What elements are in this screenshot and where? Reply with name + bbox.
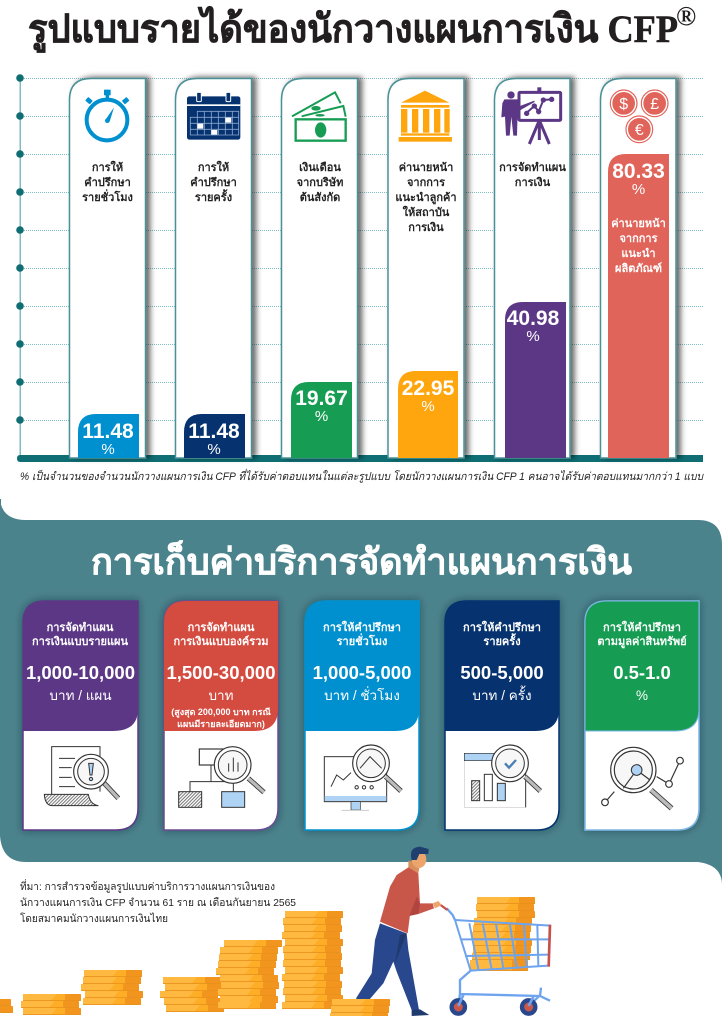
column: salary [282, 78, 358, 458]
bar 80.33% with label: แนะนำ [621, 247, 656, 260]
icon: report magnifier [464, 745, 540, 807]
column: hourly advice [70, 78, 146, 458]
coins in cart [470, 897, 535, 971]
shopping cart with coins [441, 897, 551, 1014]
fee card: hourly: 1,000-5,000 [313, 662, 411, 683]
column: per-session advice [176, 78, 252, 458]
bar 11.48% [78, 414, 139, 458]
label: แนะนำลูกค้า [395, 191, 457, 205]
bar 11.48%: % [207, 441, 221, 458]
bar 19.67%: % [315, 408, 328, 425]
source note: นักวางแผนการเงิน CFP จำนวน 61 ราย ณ เดือนกันยายน 2565 [20, 896, 296, 909]
fee card: asset-based: ตามมูลค่าสินทรัพย์ [597, 635, 687, 649]
bar 80.33% with label: จากการ [619, 233, 658, 245]
bar 11.48%: 11.48 [82, 420, 134, 443]
icon: currency coins: $ [619, 96, 628, 113]
fee card: per session: รายครั้ง [483, 633, 521, 648]
fee card: per session [445, 601, 559, 830]
label: จากการ [407, 177, 445, 189]
panel background [0, 499, 722, 885]
fee card: hourly: บาท / ชั่วโมง [324, 686, 400, 703]
source note: โดยสมาคมนักวางแผนการเงินไทย [20, 912, 168, 925]
bar 40.98%: 40.98 [507, 307, 560, 330]
icon: banknotes [292, 92, 346, 141]
label: การให้ [92, 160, 123, 174]
column: financial planning [494, 78, 570, 458]
bar 80.33% with label [608, 154, 669, 458]
registered mark: ® [676, 1, 696, 31]
label [395, 161, 457, 234]
bar 80.33% with label: % [632, 181, 645, 198]
fee card: per session: การให้คำปรึกษา [463, 620, 541, 634]
label: ให้สถาบัน [403, 205, 450, 219]
fee card: asset-based: 0.5-1.0 [613, 662, 671, 683]
bar 11.48% [184, 414, 245, 458]
fee card: corporate: (สูงสุด 200,000 บาท กรณี [171, 707, 271, 718]
icon: calendar [187, 92, 240, 140]
bar 22.95% [398, 371, 458, 458]
fee card: hourly: การให้คำปรึกษา [323, 620, 401, 634]
bar 40.98% [505, 302, 566, 458]
foreground coin stack [330, 999, 390, 1016]
bar 22.95%: % [421, 398, 435, 415]
fee card: corporate: 1,500-30,000 [166, 662, 276, 683]
fee card: corporate: การเงินแบบองค์รวม [173, 635, 269, 648]
fee card: asset-based: การให้คำปรึกษา [603, 620, 681, 634]
icon: bank [399, 91, 452, 142]
label: คำปรึกษา [84, 176, 131, 189]
chart: income types [16, 74, 703, 462]
fee card: hourly [305, 601, 419, 830]
label: ค่านายหน้า [399, 161, 453, 174]
fee card: corporate: การจัดทำแผน [188, 621, 255, 634]
bar 80.33% with label: ผลิตภัณฑ์ [615, 262, 662, 275]
bar 11.48%: 11.48 [188, 420, 240, 443]
bar 11.48%: % [101, 441, 115, 458]
fee card: per-plan: การเงินแบบรายแผน [32, 635, 128, 648]
icon: currency coins: € [635, 122, 644, 139]
icon: currency coins: £ [650, 96, 659, 113]
label: การเงิน [515, 176, 551, 189]
fee card: hourly: รายชั่วโมง [337, 633, 387, 648]
label: การเงิน [408, 221, 444, 234]
panel: planning fees [0, 499, 722, 885]
label: การให้ [198, 160, 229, 174]
fee card: per-plan: 1,000-10,000 [26, 662, 135, 683]
label [297, 161, 343, 204]
label: รายครั้ง [195, 189, 232, 204]
fee card: corporate: แผนมีรายละเอียดมาก) [177, 719, 265, 729]
heading: การเก็บค่าบริการจัดทำแผนการเงิน [91, 539, 632, 582]
label: เงินเดือน [299, 161, 341, 174]
icon: monitor magnifier [324, 745, 401, 810]
icon: network magnifier [602, 747, 683, 808]
bottom white section [0, 836, 722, 1016]
gridlines and axis [16, 74, 703, 458]
fee card: asset-based [585, 601, 699, 830]
bar 19.67% [291, 382, 352, 458]
bar 40.98%: % [526, 328, 540, 345]
chart baseline [17, 455, 703, 462]
label [82, 160, 133, 204]
fee card: corporate [164, 601, 278, 830]
source note [20, 879, 296, 925]
label [190, 160, 237, 204]
icon: stopwatch [85, 90, 129, 140]
column: product referral [600, 78, 676, 458]
fee card: per session: บาท / ครั้ง [472, 685, 532, 703]
fee card: corporate: บาท [208, 688, 234, 703]
bar 80.33% with label: 80.33 [612, 160, 665, 183]
bar 22.95%: 22.95 [402, 377, 455, 400]
source note: ที่มา: การสำรวจข้อมูลรูปแบบค่าบริการวางแผนการเงินของ [20, 879, 275, 893]
label: ต้นสังกัด [300, 191, 340, 204]
fee card: per-plan: บาท / แผน [49, 688, 112, 703]
coin stacks [0, 911, 343, 1015]
label [499, 161, 566, 189]
fee card: per session: 500-5,000 [460, 662, 544, 683]
label: คำปรึกษา [190, 176, 237, 189]
cart frame [441, 905, 551, 1014]
title: รูปแบบรายได้ของนักวางแผนการเงิน CFP [28, 6, 678, 53]
bar 19.67%: 19.67 [295, 387, 348, 410]
icon: organisation magnifier [179, 747, 264, 807]
icon: currency coins [610, 90, 668, 143]
icon: presenter [501, 87, 561, 144]
label: รายชั่วโมง [82, 189, 133, 204]
bar 80.33% with label: ค่านายหน้า [611, 217, 666, 230]
label: การจัดทำแผน [499, 161, 566, 174]
fee card: asset-based: % [636, 688, 648, 703]
fee card: per-plan [23, 601, 138, 830]
column: referral to financial institutions [388, 78, 464, 458]
icon: document magnifier [44, 747, 118, 806]
label: จากบริษัท [297, 176, 343, 189]
person pushing cart [356, 847, 442, 1016]
fee card: per-plan: การจัดทำแผน [47, 621, 114, 634]
